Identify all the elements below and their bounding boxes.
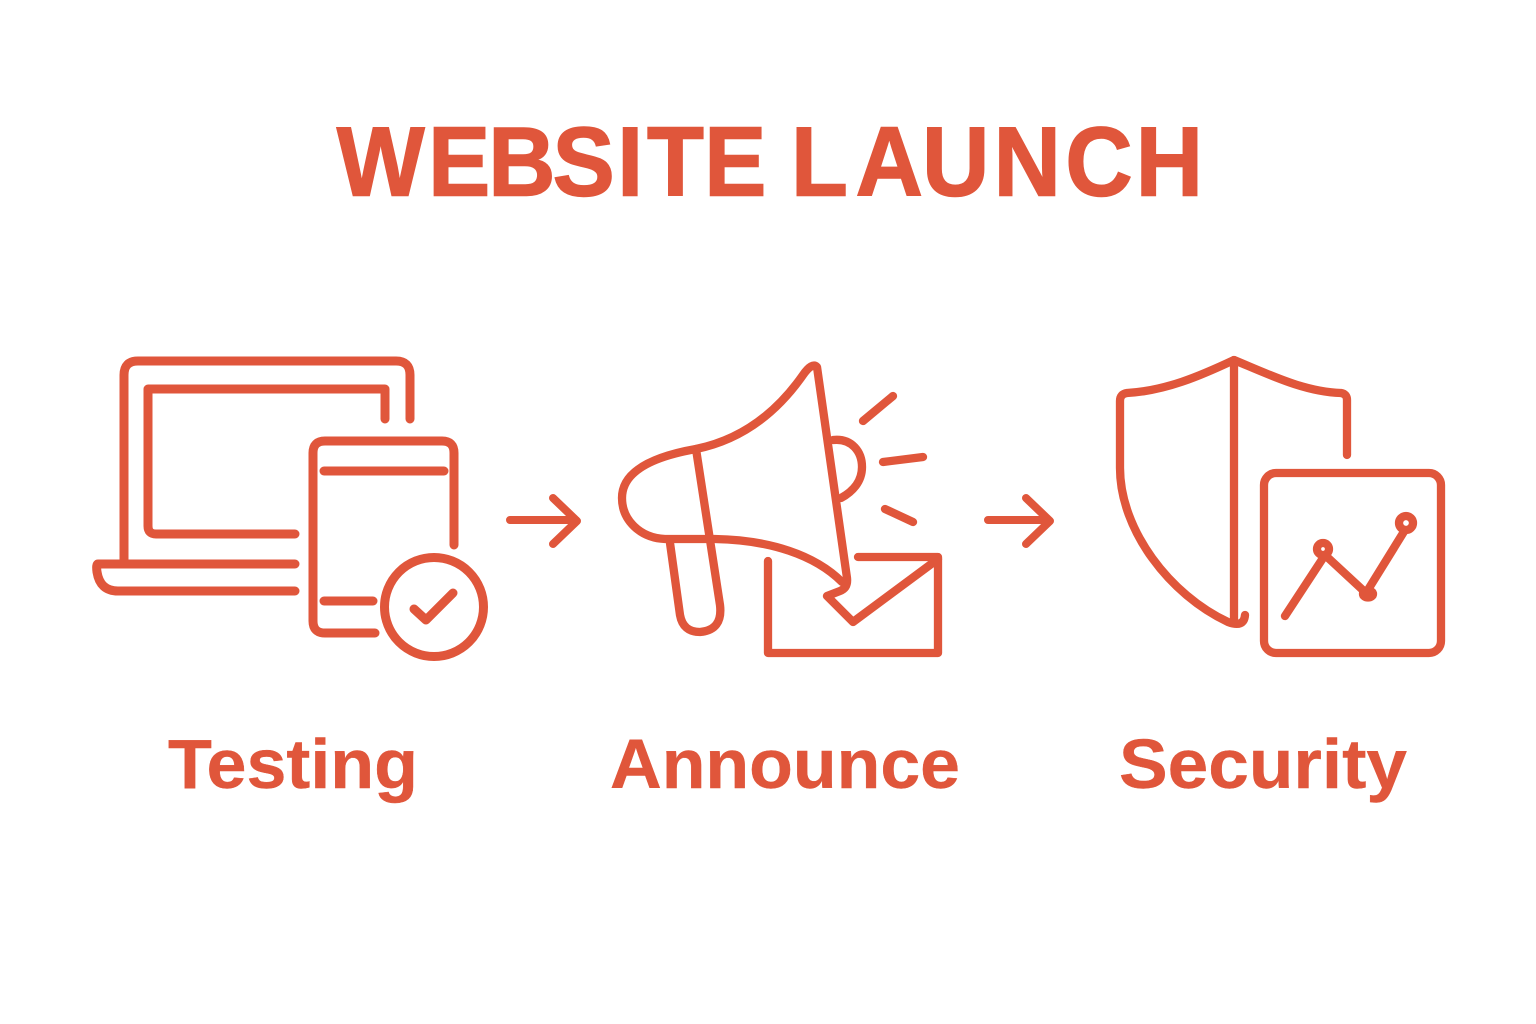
sound ray bottom <box>885 509 913 522</box>
shield centre line <box>1230 362 1238 620</box>
chart point two <box>1363 590 1373 598</box>
chart frame <box>1264 473 1441 653</box>
check mark <box>414 593 453 620</box>
title: WEBSITE LAUNCH <box>337 107 1203 217</box>
arrow: announce to security <box>988 498 1050 544</box>
label: Security: Security <box>1119 725 1407 803</box>
phone top line <box>324 466 444 476</box>
megaphone handle <box>670 449 720 632</box>
check badge circle <box>384 558 484 656</box>
shield left side <box>1120 360 1245 624</box>
phone body <box>313 441 454 633</box>
laptop lid <box>124 361 410 562</box>
arrow: testing to announce <box>510 498 577 544</box>
icon: shield and chart <box>1120 360 1441 653</box>
sound ray middle <box>883 457 923 462</box>
icon: laptop and phone testing <box>97 361 484 656</box>
megaphone horn <box>622 366 938 622</box>
label: Testing: Testing <box>168 725 418 803</box>
shield right side <box>1234 360 1347 455</box>
envelope <box>768 557 938 653</box>
sound ray top <box>863 396 893 421</box>
chart line <box>1285 530 1405 616</box>
laptop base <box>97 564 295 591</box>
laptop screen <box>148 389 385 534</box>
megaphone cap <box>833 440 862 498</box>
chart point one <box>1317 543 1329 555</box>
phone lower line <box>324 596 373 606</box>
icon: megaphone and envelope <box>622 366 938 653</box>
chart point three <box>1399 516 1413 530</box>
label: Announce: Announce <box>610 725 960 803</box>
